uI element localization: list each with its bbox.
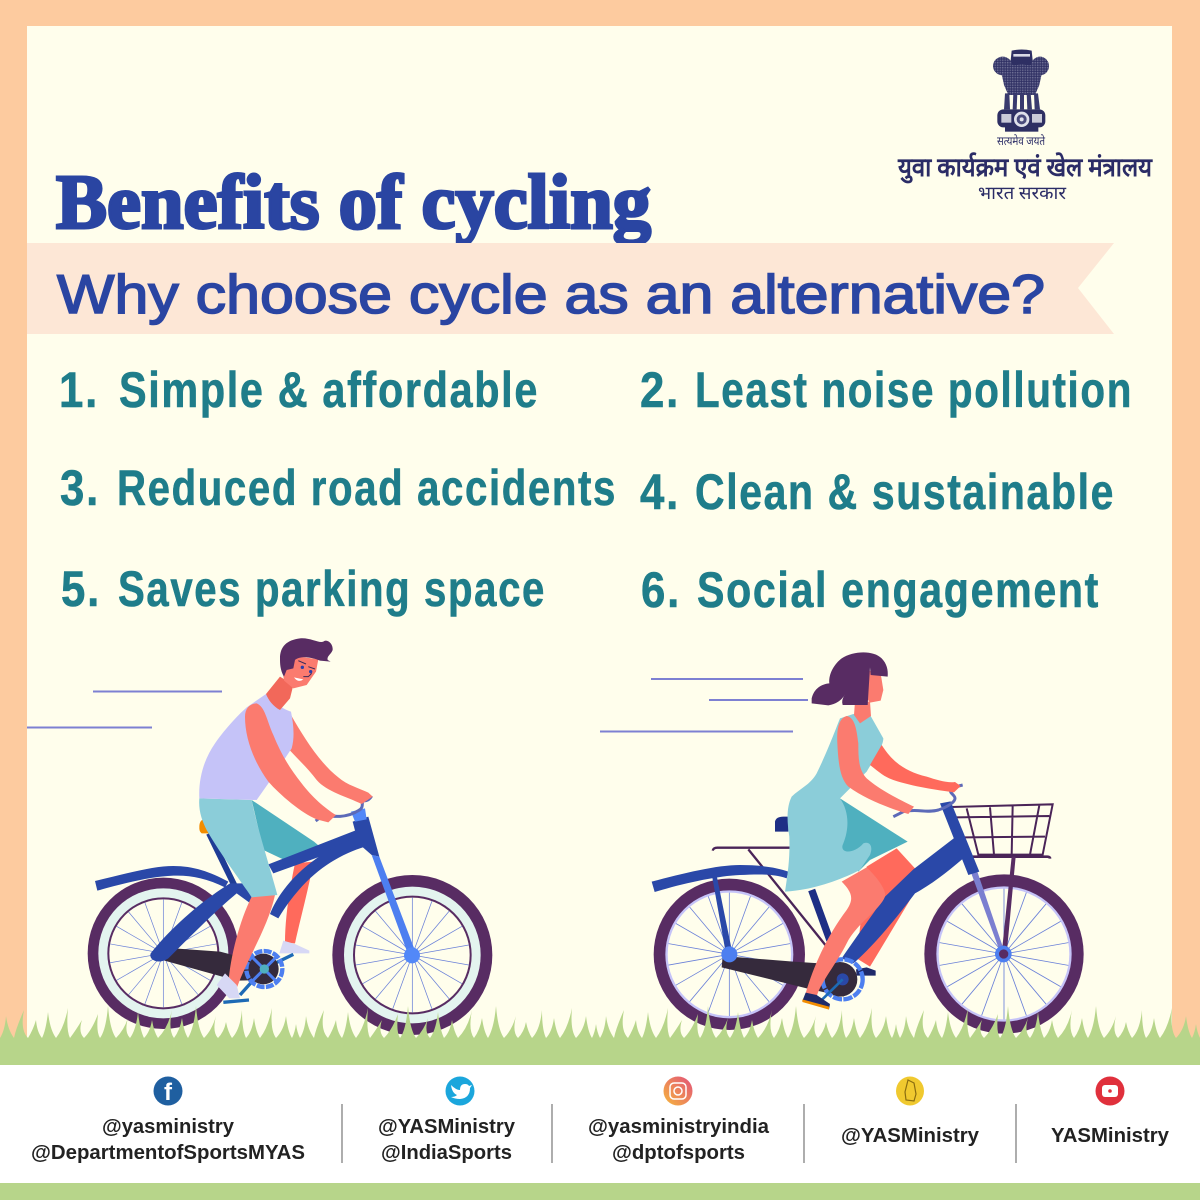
koo column — [841, 1076, 980, 1147]
koo handle: @YASMinistry — [841, 1125, 980, 1147]
near leg — [228, 895, 275, 987]
benefit 6: 6. — [641, 562, 681, 618]
icon: instagram — [664, 1076, 692, 1106]
benefit 1: 1. — [59, 362, 99, 418]
icon: twitter — [446, 1076, 474, 1106]
handlebar — [893, 785, 963, 817]
front strut — [1002, 857, 1016, 954]
far leg — [285, 862, 313, 943]
face — [282, 655, 318, 688]
youtube handle: YASMinistry — [1051, 1125, 1170, 1147]
chain guard — [160, 947, 265, 981]
speed lines: woman — [600, 679, 808, 732]
icon: koo — [896, 1076, 924, 1106]
bicycle frame — [150, 817, 379, 961]
icon: youtube — [1096, 1076, 1124, 1106]
chainring — [823, 959, 863, 999]
crank — [820, 979, 843, 1002]
seat — [199, 819, 212, 833]
speed lines: man — [27, 692, 222, 728]
icon: facebook — [154, 1076, 182, 1106]
instagram handle 2: @dptofsports — [612, 1142, 745, 1164]
front wheel — [332, 875, 492, 1035]
twitter column — [378, 1076, 516, 1164]
footer green strip — [0, 1183, 1200, 1200]
rear stay — [712, 876, 733, 954]
rear fender — [652, 865, 788, 892]
front hub — [404, 947, 420, 963]
far shoe — [856, 967, 876, 976]
icon: state emblem — [993, 49, 1049, 132]
front wheel — [924, 874, 1084, 1034]
handlebar — [316, 796, 372, 821]
benefit 4: 4. — [640, 464, 680, 520]
far leg — [857, 848, 915, 967]
stem — [351, 808, 367, 822]
subtitle ribbon — [27, 243, 1114, 334]
far pedal — [263, 954, 293, 969]
benefit 1 label: Simple & affordable — [119, 362, 539, 418]
chain guard — [722, 956, 844, 997]
face — [863, 670, 883, 703]
shoe sole — [802, 999, 829, 1010]
hair — [812, 652, 888, 705]
neck — [266, 677, 293, 710]
benefit 3: 3. — [60, 460, 100, 516]
ministry name: युवा कार्यक्रम एवं खेल मंत्रालय — [897, 152, 1153, 184]
illustration: woman on bicycle — [652, 652, 1084, 1034]
government of India: भारत सरकार — [978, 183, 1067, 203]
youtube column — [1051, 1076, 1170, 1147]
fork — [971, 872, 1003, 950]
rear hub — [721, 946, 737, 962]
near leg — [806, 867, 885, 997]
dress — [785, 714, 883, 892]
seat tube — [812, 890, 832, 945]
icon: facebook: f — [164, 1079, 173, 1106]
facebook column — [31, 1076, 305, 1164]
rear wheel — [88, 878, 239, 1029]
grass — [0, 1006, 1200, 1066]
rear fender — [95, 866, 228, 891]
chainring — [246, 951, 282, 987]
rear rack — [713, 848, 827, 947]
eyes and smile — [294, 661, 315, 681]
near shoe — [217, 973, 240, 998]
benefit 6 label: Social engagement — [697, 562, 1100, 618]
bicycle frame — [842, 837, 968, 963]
government emblem and ministry name — [897, 49, 1153, 203]
front hub — [995, 946, 1012, 962]
crank and near pedal — [223, 969, 263, 1002]
seat tube — [209, 833, 237, 890]
shorts — [199, 798, 277, 897]
benefit 3 label: Reduced road accidents — [117, 460, 617, 516]
facebook handle 2: @DepartmentofSportsMYAS — [31, 1142, 305, 1164]
footer background — [0, 1065, 1200, 1183]
instagram handle 1: @yasministryindia — [588, 1116, 770, 1138]
dress skirt back — [840, 798, 908, 872]
head tube — [940, 801, 979, 875]
twitter handle 1: @YASMinistry — [378, 1116, 516, 1138]
subtitle text: Why choose cycle as an alternative? — [57, 263, 1045, 325]
far arm — [287, 715, 373, 804]
fork — [372, 855, 417, 955]
ribbon shape — [27, 243, 1114, 334]
social footer — [0, 1065, 1200, 1200]
emblem motto: सत्यमेव जयते — [997, 134, 1046, 148]
far arm — [870, 745, 961, 792]
rear wheel — [654, 879, 805, 1030]
near arm — [837, 716, 914, 814]
illustration: man on bicycle — [88, 638, 492, 1035]
neck — [854, 702, 871, 723]
shirt — [199, 694, 294, 800]
seat — [775, 817, 788, 832]
far shorts — [252, 800, 327, 865]
instagram column — [588, 1076, 770, 1164]
title: Benefits of cycling — [56, 159, 651, 245]
far shoe — [279, 941, 309, 953]
basket — [952, 804, 1053, 859]
benefit 2: 2. — [640, 362, 680, 418]
twitter handle 2: @IndiaSports — [381, 1142, 512, 1164]
benefit 5 label: Saves parking space — [118, 561, 546, 617]
hair — [280, 638, 333, 677]
benefits list — [59, 362, 1133, 618]
facebook handle 1: @yasministry — [102, 1116, 235, 1138]
near shoe — [802, 993, 830, 1009]
benefit 5: 5. — [61, 561, 101, 617]
near arm — [245, 703, 336, 822]
benefit 4 label: Clean & sustainable — [695, 464, 1115, 520]
